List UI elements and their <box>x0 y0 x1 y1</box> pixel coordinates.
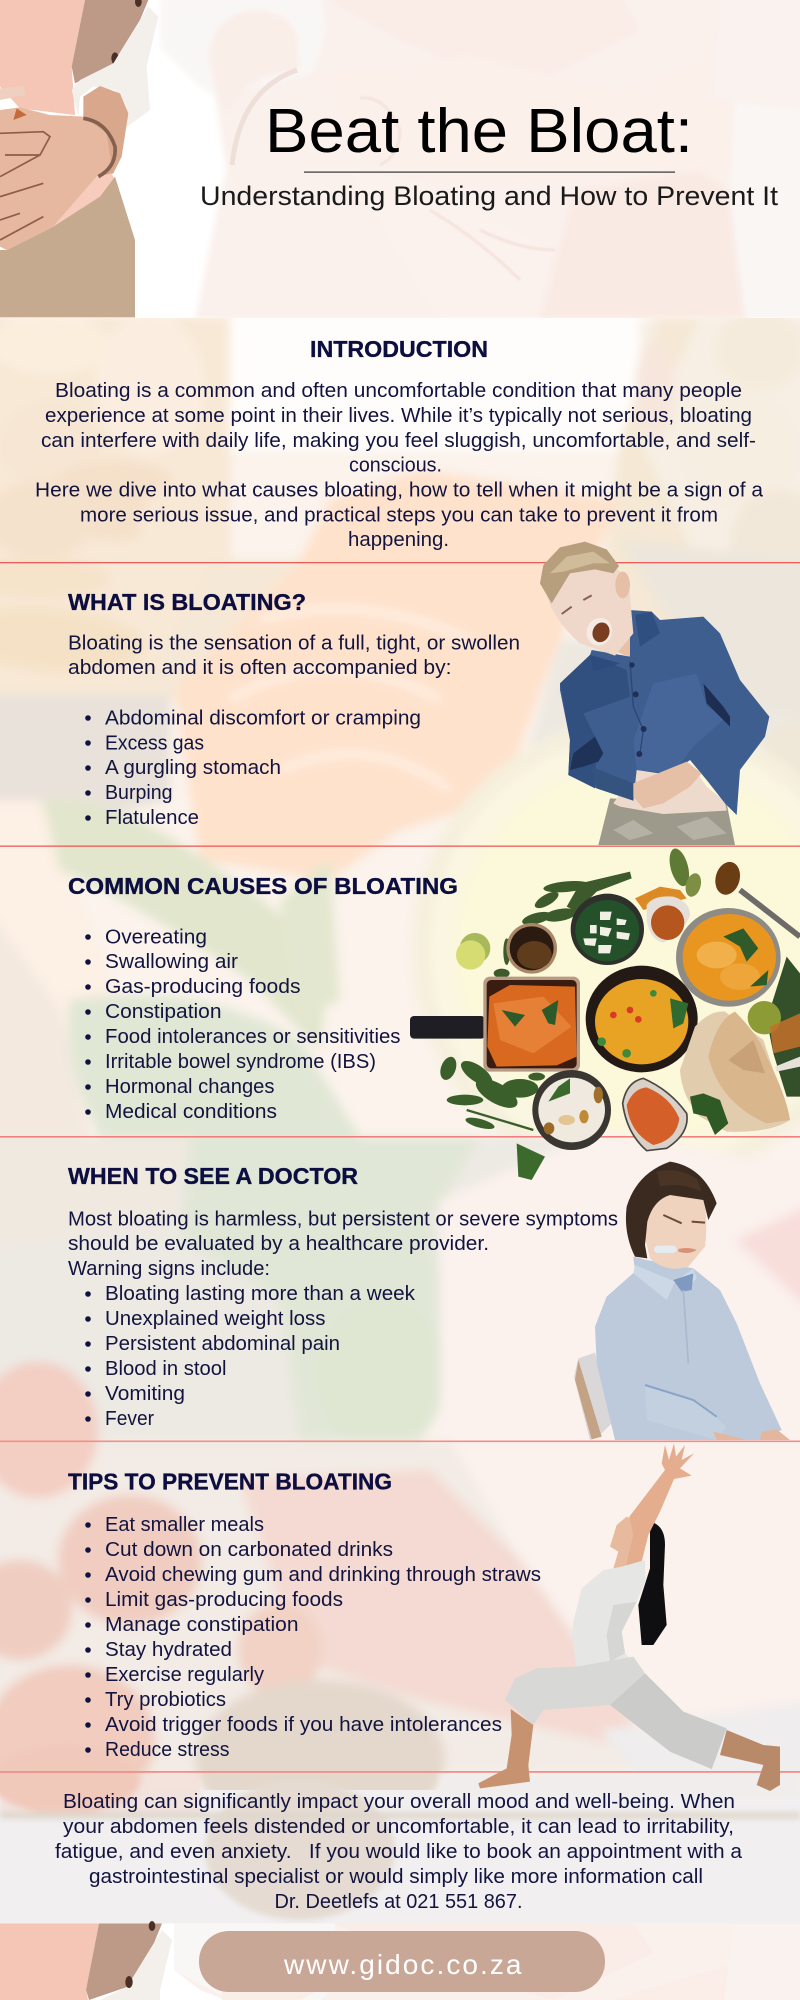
spinach bowl <box>571 894 644 965</box>
panel: closing note <box>55 1791 743 1913</box>
tips list: Try probiotics <box>105 1689 226 1711</box>
tips list: Reduce stress <box>105 1739 230 1761</box>
description: should be evaluated by a healthcare provider. <box>68 1233 489 1255</box>
introduction text: happening. <box>348 529 449 551</box>
food spread illustration <box>410 846 800 1180</box>
symptom list: Burping <box>105 782 172 804</box>
pan <box>483 977 580 1072</box>
causes list: Medical conditions <box>105 1101 277 1123</box>
heading: TIPS TO PREVENT BLOATING <box>68 1468 392 1494</box>
symptom list: A gurgling stomach <box>105 757 281 779</box>
wood and oats <box>0 800 120 1137</box>
introduction text: Bloating is a common and often uncomfortable condition that many people <box>55 380 742 402</box>
header panel <box>0 0 800 320</box>
doctor section <box>0 1137 600 1440</box>
pepper cup <box>506 923 557 974</box>
panel: tips to prevent bloating <box>68 1443 780 1791</box>
flatbread <box>680 1012 790 1132</box>
title rule <box>304 172 675 173</box>
symptom list: Excess gas <box>105 732 204 754</box>
causes list <box>85 926 400 1123</box>
causes list: Irritable bowel syndrome (IBS) <box>105 1051 376 1073</box>
header photo <box>0 0 800 320</box>
footer strip base <box>0 1790 800 1924</box>
spoon <box>740 890 800 937</box>
title: Beat the Bloat: <box>265 97 693 166</box>
tips list: Avoid trigger foods if you have intolerances <box>105 1714 502 1736</box>
figure: boy with thermometer <box>574 1162 790 1440</box>
glass bowl <box>412 717 800 1183</box>
closing text: gastrointestinal specialist or would simply like more information call <box>89 1866 703 1888</box>
introduction text <box>35 380 764 551</box>
spice leaves <box>666 846 693 888</box>
causes list: Swallowing air <box>105 951 238 973</box>
closing text <box>55 1791 743 1913</box>
greens top <box>494 872 632 978</box>
warning signs list: Vomiting <box>105 1383 185 1405</box>
greens bottom left <box>437 1055 545 1131</box>
causes list: Food intolerances or sensitivities <box>105 1026 400 1048</box>
description: abdomen and it is often accompanied by: <box>68 657 452 679</box>
lime <box>460 933 490 964</box>
closing text: your abdomen feels distended or uncomfortable, it can lead to irritability, <box>63 1816 734 1838</box>
paprika dish <box>647 896 690 943</box>
spinach leaves <box>42 799 330 1050</box>
causes list: Constipation <box>105 1001 222 1023</box>
causes list: Gas-producing foods <box>105 976 300 998</box>
panel: common causes of bloating <box>68 846 800 1180</box>
figure: boy holding stomach <box>540 542 769 845</box>
section divider lines <box>0 562 800 1773</box>
tips list: Avoid chewing gum and drinking through straws <box>105 1564 541 1586</box>
panel: when to see a doctor <box>68 1162 790 1440</box>
introduction heading: INTRODUCTION <box>310 336 488 362</box>
introduction text: experience at some point in their lives. While it’s typically not serious, bloating <box>45 405 752 427</box>
tips list: Limit gas-producing foods <box>105 1589 343 1611</box>
symptom list: Abdominal discomfort or cramping <box>105 708 421 730</box>
tomatoes <box>0 1362 98 1498</box>
tips list: Eat smaller meals <box>105 1514 264 1536</box>
lentils <box>195 1680 445 1840</box>
salmon <box>175 470 620 880</box>
closing text: Dr. Deetlefs at 021 551 867. <box>274 1891 522 1913</box>
description: Most bloating is harmless, but persistent or severe symptoms <box>68 1208 618 1230</box>
heading: COMMON CAUSES OF BLOATING <box>68 873 458 899</box>
symptom list <box>85 708 421 829</box>
introduction text: Here we dive into what causes bloating, how to tell when it might be a sign of a <box>35 480 764 502</box>
tips list <box>85 1514 541 1761</box>
panel: introduction <box>35 336 764 551</box>
meat <box>0 1440 640 1772</box>
greens right <box>767 957 800 1097</box>
grey area <box>0 695 170 820</box>
heading: WHAT IS BLOATING? <box>68 589 306 615</box>
causes list: Hormonal changes <box>105 1076 274 1098</box>
tips list: Manage constipation <box>105 1614 298 1636</box>
subtitle: Understanding Bloating and How to Prevent It <box>200 181 779 211</box>
warning signs list: Fever <box>105 1408 154 1430</box>
pan handle <box>410 1016 485 1039</box>
description: Bloating is the sensation of a full, tight, or swollen <box>68 632 520 654</box>
curry bowl <box>676 908 781 1007</box>
rice plate <box>586 966 698 1072</box>
warning signs list: Unexplained weight loss <box>105 1308 326 1330</box>
closing text: fatigue, and even anxiety. If you would like to book an appointment with a <box>55 1841 743 1863</box>
tips list: Exercise regularly <box>105 1664 264 1686</box>
website button <box>199 1931 605 1992</box>
panel: what is bloating <box>68 542 769 845</box>
closing text: Bloating can significantly impact your overall mood and well-being. When <box>63 1791 735 1813</box>
description <box>68 1208 618 1280</box>
description <box>68 632 520 679</box>
warning signs list: Persistent abdominal pain <box>105 1333 340 1355</box>
rice bowl <box>532 1070 611 1150</box>
nuts left and right <box>0 318 230 698</box>
symptom list: Flatulence <box>105 807 199 829</box>
warning signs list: Blood in stool <box>105 1358 226 1380</box>
stray leaf <box>517 1143 545 1180</box>
warning signs list <box>85 1283 416 1430</box>
footer strip photo <box>0 1921 800 2000</box>
introduction text: conscious. <box>349 454 442 476</box>
lime wedge <box>748 1001 781 1034</box>
tips list: Stay hydrated <box>105 1639 232 1661</box>
website url: www.gidoc.co.za <box>283 1949 522 1980</box>
heading: WHEN TO SEE A DOCTOR <box>68 1163 358 1189</box>
chutney bowl <box>623 1078 687 1151</box>
introduction text: can interfere with daily life, making you feel sluggish, uncomfortable, and self- <box>41 430 756 452</box>
causes list: Overeating <box>105 926 207 948</box>
introduction text: more serious issue, and practical steps you can take to prevent it from <box>80 504 718 526</box>
tips list: Cut down on carbonated drinks <box>105 1539 393 1561</box>
description: Warning signs include: <box>68 1258 270 1280</box>
warning signs list: Bloating lasting more than a week <box>105 1283 416 1305</box>
figure: woman in yoga pose <box>478 1443 780 1791</box>
